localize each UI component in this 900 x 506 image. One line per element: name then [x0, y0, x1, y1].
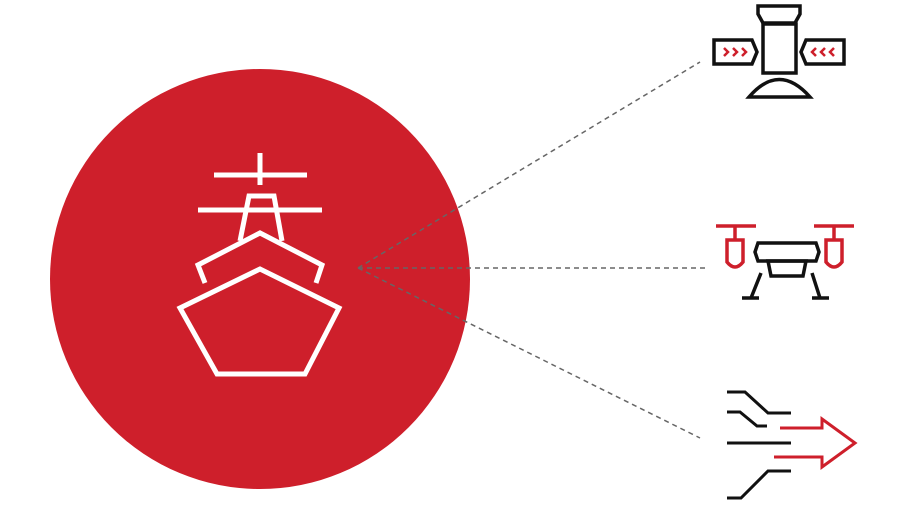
- icon: drone: [716, 226, 854, 298]
- red circle: [50, 69, 470, 489]
- icon: satellite: [714, 6, 844, 97]
- icon: motion arrow: [727, 392, 855, 498]
- icon: ship: [180, 153, 339, 374]
- connector lines: [358, 62, 705, 438]
